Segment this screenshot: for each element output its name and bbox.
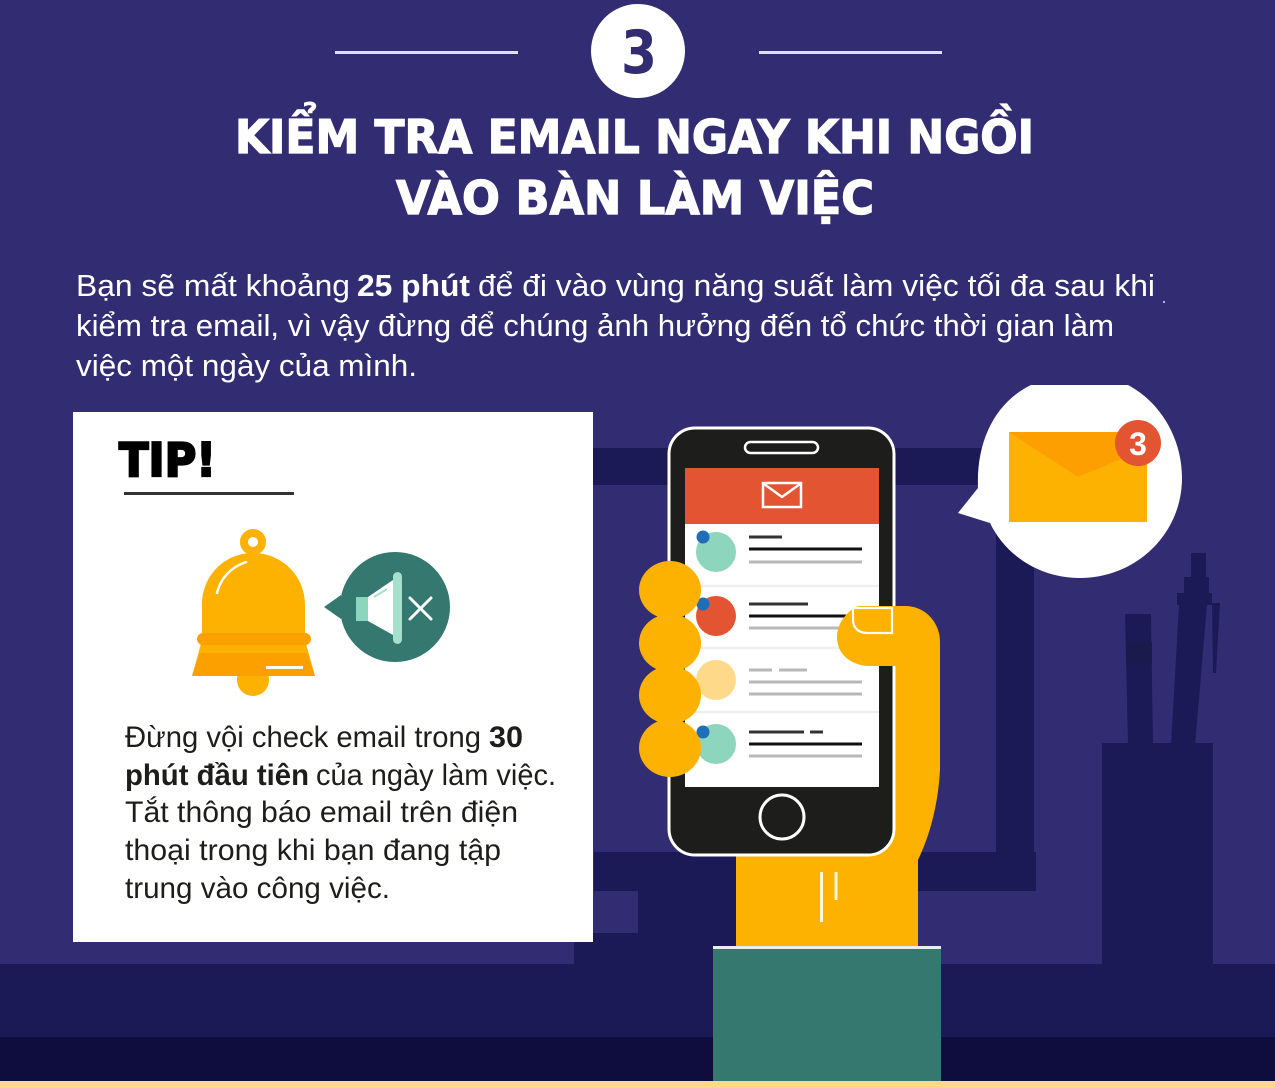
- tip heading: TIP!: [119, 433, 216, 487]
- intro paragraph: để đi vào vùng năng suất làm việc tối đa sau khi: [478, 268, 1155, 303]
- intro paragraph: [76, 268, 1155, 383]
- title: KIỂM TRA EMAIL NGAY KHI NGỒI: [235, 102, 1034, 164]
- tip text: Đừng vội check email trong: [125, 721, 481, 754]
- background: desk scene: [0, 448, 1275, 1088]
- left rule: [335, 51, 518, 54]
- intro paragraph: việc một ngày của mình.: [76, 348, 417, 383]
- number 3: 3: [621, 18, 657, 88]
- tip text: 30: [489, 721, 523, 754]
- tip panel: [73, 412, 593, 942]
- email row 1: [696, 530, 862, 572]
- screen header: [685, 468, 879, 524]
- fingers: [639, 561, 701, 777]
- smartphone: [669, 428, 894, 855]
- stray dot: [1163, 301, 1165, 303]
- speech bubble with email notification: [958, 385, 1182, 578]
- home button: [760, 795, 804, 839]
- title: VÀO BÀN LÀM VIỆC: [396, 171, 874, 225]
- number circle: [591, 4, 685, 98]
- thumb: [837, 606, 900, 666]
- speaker slot: [745, 442, 818, 453]
- email row 4: [696, 724, 862, 764]
- bottom stripe: [0, 1081, 1275, 1088]
- tip text: Tắt thông báo email trên điện: [125, 796, 518, 829]
- thumbnail: [853, 608, 892, 633]
- icon: bell: [192, 533, 315, 696]
- intro paragraph: kiểm tra email, vì vậy đừng để chúng ảnh hưởng đến tổ chức thời gian làm: [76, 308, 1114, 343]
- monitor silhouette: [574, 448, 1036, 964]
- email row 2: [696, 596, 862, 636]
- hand and arm behind phone: [736, 606, 940, 948]
- tip text: trung vào công việc.: [125, 872, 390, 905]
- phone screen: [685, 524, 879, 787]
- pencil and pen holder silhouette: [1102, 553, 1220, 964]
- sleeve cuff: [713, 946, 941, 1081]
- tip underline: [124, 492, 294, 495]
- tip text: [125, 721, 556, 905]
- desk front: [0, 1037, 1275, 1081]
- wrist lines: [822, 872, 836, 922]
- section number badge: [335, 4, 942, 98]
- right rule: [759, 51, 942, 54]
- notification badge: [1115, 420, 1161, 466]
- icon: envelope: [1009, 432, 1147, 522]
- tip text: của ngày làm việc.: [316, 759, 556, 792]
- desk surface: [0, 964, 1275, 1037]
- email row 3: [696, 660, 862, 700]
- icon: muted speaker bubble: [324, 552, 450, 662]
- list dividers: [685, 586, 879, 712]
- title: [235, 102, 1034, 225]
- tip text: phút đầu tiên: [125, 759, 309, 792]
- intro paragraph: 25 phút: [357, 268, 470, 303]
- notification badge: 3: [1129, 426, 1147, 462]
- intro paragraph: Bạn sẽ mất khoảng: [76, 268, 350, 303]
- tip text: thoại trong khi bạn đang tập: [125, 834, 501, 867]
- icon: mail: [763, 483, 801, 507]
